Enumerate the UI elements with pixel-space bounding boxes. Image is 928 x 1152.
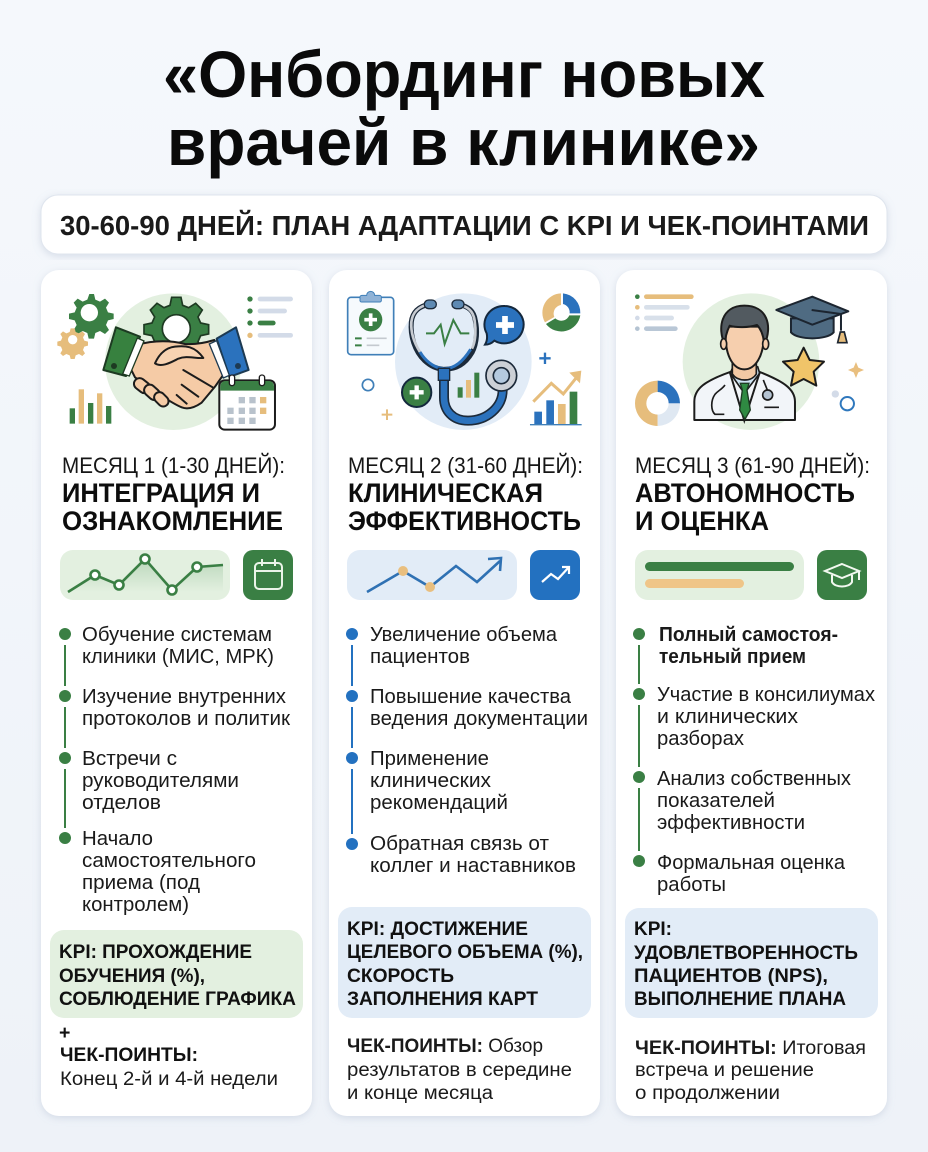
checklist month 2: ведения документации [370,708,588,730]
month 3 heading [635,453,870,536]
checkpoints month 3: ЧЕК-ПОИНТЫ: Итоговая [635,1038,866,1059]
checklist month 1: Начало [82,828,153,850]
subtitle banner: 30-60-90 ДНЕЙ: ПЛАН АДАПТАЦИИ С KPI И ЧЕК-ПОИНТАМИ [60,209,869,241]
checklist month 2: Повышение качества [370,686,572,708]
checklist month 1: Обучение системам [82,624,272,646]
checkpoints month 1: ЧЕК-ПОИНТЫ: [60,1044,198,1066]
icon: calendar tile [243,550,293,600]
icon: doctor illustration [635,293,864,430]
checkpoints month 2: результатов в середине [347,1060,572,1081]
title: врачей в клинике» [167,105,760,179]
chart: blue trend banner [347,550,517,600]
panel: month 1 [41,270,312,1116]
checklist month 3: Полный самостоя- [659,624,838,646]
checklist month 1: протоколов и политик [82,708,290,730]
KPI box month 3: ВЫПОЛНЕНИЕ ПЛАНА [634,988,846,1010]
checkpoints month 2: ЧЕК-ПОИНТЫ: Обзор [347,1036,543,1057]
checklist month 1: приема (под [82,872,200,894]
checkpoints month 1 [59,1022,278,1090]
checklist month 1: самостоятельного [82,850,256,872]
checklist month 1: клиники (МИС, МРК) [82,646,274,668]
checklist month 3: и клинических [657,706,798,728]
checklist month 3: разборах [657,728,744,750]
KPI box month 3: УДОВЛЕТВОРЕННОСТЬ [634,942,858,964]
KPI box month 2: СКОРОСТЬ [347,965,454,987]
chart: progress bars banner [635,550,804,600]
KPI box month 2: KPI: ДОСТИЖЕНИЕ [347,918,528,940]
checklist month 3: показателей [657,790,775,812]
month 2 heading: ЭФФЕКТИВНОСТЬ [348,506,581,536]
checklist month 2: рекомендаций [370,792,508,814]
checklist month 1: Изучение внутренних [82,686,286,708]
title [163,37,765,179]
checklist month 3: Анализ собственных [657,768,851,790]
panel: month 2 [329,270,600,1116]
checklist month 1: Встречи с [82,748,177,770]
icon: handshake illustration [57,293,293,430]
KPI box month 3: ПАЦИЕНТОВ (NPS), [634,965,828,987]
subtitle banner [41,195,887,254]
checklist month 3: работы [657,874,726,896]
checklist month 1: контролем) [82,894,189,916]
checklist month 2: Применение [370,748,489,770]
KPI box month 1: KPI: ПРОХОЖДЕНИЕ [59,941,252,963]
month 1 heading: ИНТЕГРАЦИЯ И [62,478,260,508]
title: «Онбординг новых [163,37,765,111]
checklist month 1 [59,624,290,916]
checklist month 2: пациентов [370,646,470,668]
KPI box month 2 [338,907,591,1018]
checkpoints month 3: о продолжении [635,1083,780,1104]
month 2 heading: МЕСЯЦ 2 (31-60 ДНЕЙ): [348,453,583,478]
checklist month 2: клинических [370,770,491,792]
month 3 heading: МЕСЯЦ 3 (61-90 ДНЕЙ): [635,453,870,478]
KPI box month 2: ЗАПОЛНЕНИЯ КАРТ [347,988,538,1010]
KPI box month 2: ЦЕЛЕВОГО ОБЪЕМА (%), [347,941,583,963]
month 1 heading [62,453,285,536]
checklist month 2: Увеличение объема [370,624,558,646]
checklist month 2 [346,624,588,877]
checkpoints month 2 [347,1036,572,1104]
KPI box month 1: СОБЛЮДЕНИЕ ГРАФИКА [59,988,296,1010]
checkpoints month 1: + [59,1022,70,1044]
panel: month 3 [616,270,887,1116]
month 2 heading [348,453,583,536]
KPI box month 3: KPI: [634,918,672,940]
checklist month 3: эффективности [657,812,805,834]
month 3 heading: И ОЦЕНКА [635,506,769,536]
checklist month 3: Участие в консилиумах [657,684,875,706]
month 2 heading: КЛИНИЧЕСКАЯ [348,478,543,508]
checkpoints month 3: встреча и решение [635,1060,814,1081]
checklist month 1: руководителями [82,770,239,792]
checklist month 2: коллег и наставников [370,855,576,877]
checkpoints month 1: Конец 2-й и 4-й недели [60,1069,278,1090]
checkpoints month 2: и конце месяца [347,1083,493,1104]
checklist month 2: Обратная связь от [370,833,549,855]
checklist month 3 [633,624,875,896]
month 3 heading: АВТОНОМНОСТЬ [635,478,855,508]
icon: trend tile [530,550,580,600]
KPI box month 1 [50,930,303,1018]
icon: graduation cap tile [817,550,867,600]
checkpoints month 3 [635,1038,866,1104]
checklist month 3: тельный прием [659,646,806,668]
chart: green line banner [60,550,230,600]
month 1 heading: МЕСЯЦ 1 (1-30 ДНЕЙ): [62,453,285,478]
icon: stethoscope illustration [348,291,582,430]
checklist month 3: Формальная оценка [657,852,846,874]
checklist month 1: отделов [82,792,161,814]
KPI box month 3 [625,908,878,1018]
month 1 heading: ОЗНАКОМЛЕНИЕ [62,506,283,536]
KPI box month 1: ОБУЧЕНИЯ (%), [59,965,205,987]
